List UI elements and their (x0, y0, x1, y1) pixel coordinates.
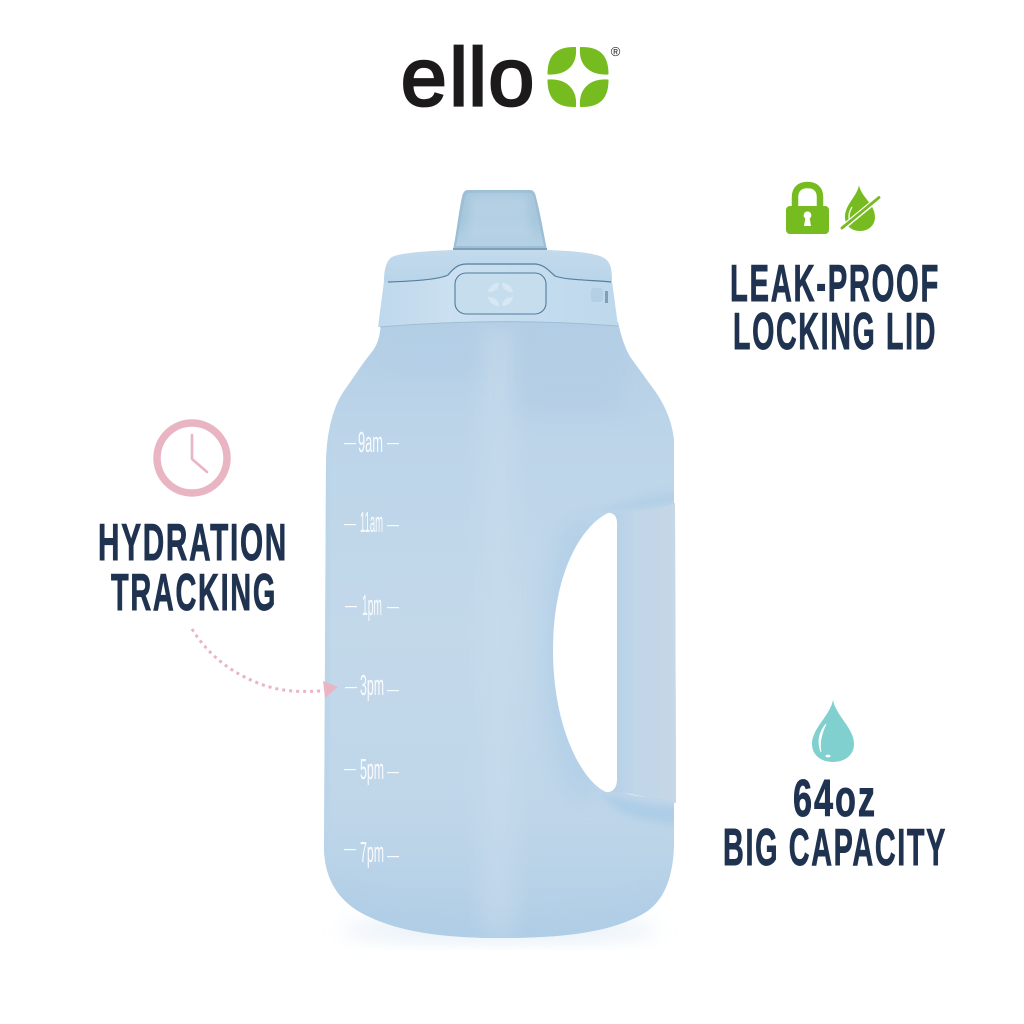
lid lower ring (378, 262, 618, 327)
button ghost logo (488, 283, 513, 306)
time marking: 3pm (345, 670, 399, 702)
icon: clock (157, 423, 227, 493)
lid (378, 190, 618, 327)
heading: leak-proof locking lid (730, 255, 940, 361)
spout inner (456, 193, 544, 246)
time marking: 11am: 11am (360, 507, 383, 539)
bottle handle (612, 503, 676, 803)
heading: hydration tracking (98, 514, 288, 622)
lid seam line (388, 264, 611, 282)
callout: 64oz big capacity (723, 700, 947, 877)
arrow: dotted pointer to 3pm (192, 629, 338, 698)
lid button (455, 273, 546, 314)
time marking: 5pm (344, 754, 399, 786)
time marking: 11am (344, 507, 399, 539)
body shading (318, 325, 680, 960)
handle grip (610, 503, 676, 803)
callout: hydration tracking (98, 423, 338, 698)
logo: ello (401, 32, 621, 123)
lid bottom seam (380, 322, 618, 327)
callout: leak-proof locking lid (730, 185, 940, 361)
lid upper cap (384, 250, 612, 282)
time marking: 7pm: 7pm (360, 837, 384, 869)
infographic canvas (100, 44, 946, 946)
time marking: 3pm: 3pm (360, 670, 384, 702)
spout (453, 190, 547, 250)
heading: 64oz big capacity: 64oz (793, 770, 877, 828)
bottle body (318, 322, 680, 960)
time marking: 7pm (344, 837, 399, 869)
icon: lock (786, 185, 829, 234)
icon: water drop (812, 700, 854, 762)
time marking: 5pm: 5pm (360, 754, 384, 786)
ground shadow (340, 920, 660, 940)
registered mark: ® (611, 44, 621, 59)
bottle (318, 190, 680, 960)
spout base edge (453, 248, 547, 250)
logo leaves mark (548, 47, 608, 107)
handle opening (553, 513, 617, 792)
heading: hydration tracking: HYDRATION (98, 514, 288, 572)
time marking: 9am (344, 427, 399, 459)
time marking: 1pm: 1pm (362, 590, 382, 622)
icon: no-leak drop (841, 185, 880, 231)
lid latch (591, 288, 608, 303)
spout light panel (466, 196, 532, 240)
heading: 64oz big capacity (723, 770, 947, 877)
logo wordmark: ello (401, 32, 534, 123)
heading: hydration tracking: TRACKING (111, 564, 277, 622)
time marking: 9am: 9am (358, 427, 383, 459)
time marking: 1pm (345, 590, 399, 622)
